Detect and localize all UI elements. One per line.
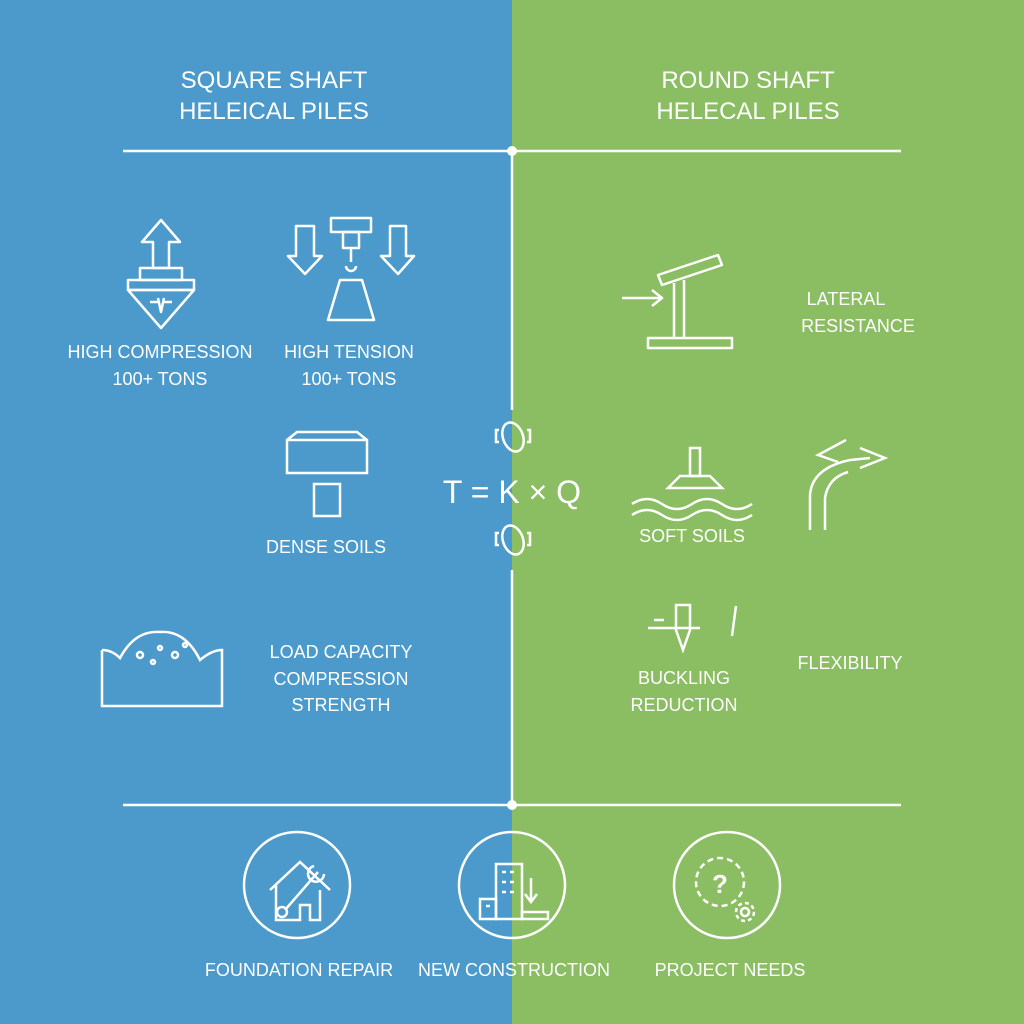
- label: high compression: [67, 342, 253, 389]
- label: load capacity: COMPRESSION: [273, 669, 409, 689]
- label: lateral resistance: LATERAL: [807, 289, 885, 309]
- label: load capacity: LOAD CAPACITY: [270, 642, 412, 662]
- icon: buckling: [648, 605, 736, 650]
- icon: formula marks: [496, 419, 530, 558]
- title: round shaft: [656, 67, 840, 125]
- formula: T = K × Q: [443, 474, 581, 510]
- label: dense soils: DENSE SOILS: [266, 537, 386, 557]
- label: load capacity: [270, 642, 412, 715]
- text: ?: [712, 869, 728, 899]
- label: buckling reduction: [630, 668, 738, 715]
- icon: high compression: [128, 220, 194, 328]
- label: soft soils: SOFT SOILS: [639, 526, 745, 546]
- icon: dense soils: [287, 432, 367, 516]
- title: round shaft: ROUND SHAFT: [661, 67, 835, 94]
- label: load capacity: STRENGTH: [292, 695, 390, 715]
- icon: project needs: [674, 832, 780, 938]
- label: flexibility: FLEXIBILITY: [797, 653, 903, 673]
- label: project needs: PROJECT NEEDS: [655, 960, 805, 980]
- icon: load capacity: [102, 632, 222, 706]
- title: square shaft: SQUARE SHAFT: [181, 67, 368, 94]
- icon: high tension: [288, 218, 414, 320]
- label: high tension: HIGH TENSION: [284, 342, 414, 362]
- label: foundation repair: FOUNDATION REPAIR: [205, 960, 393, 980]
- title: square shaft: HELEICAL PILES: [179, 98, 369, 125]
- label: new construction: NEW CONSTRUCTION: [418, 960, 610, 980]
- label: lateral resistance: RESISTANCE: [801, 316, 915, 336]
- icon: new construction: [459, 832, 565, 938]
- label: lateral resistance: [801, 289, 915, 336]
- icon: soft soils: [632, 448, 752, 520]
- label: high compression: HIGH COMPRESSION: [67, 342, 253, 362]
- label: high tension: [284, 342, 414, 389]
- title: square shaft: [179, 67, 369, 125]
- title: round shaft: HELECAL PILES: [656, 98, 840, 125]
- label: buckling reduction: REDUCTION: [630, 695, 738, 715]
- label: buckling reduction: BUCKLING: [638, 668, 730, 688]
- label: high compression: 100+ TONS: [113, 369, 207, 389]
- icon: foundation repair: [244, 832, 350, 938]
- label: high tension: 100+ TONS: [302, 369, 396, 389]
- icon: lateral resistance: [622, 255, 732, 348]
- icon: flexibility arrows: [810, 440, 885, 530]
